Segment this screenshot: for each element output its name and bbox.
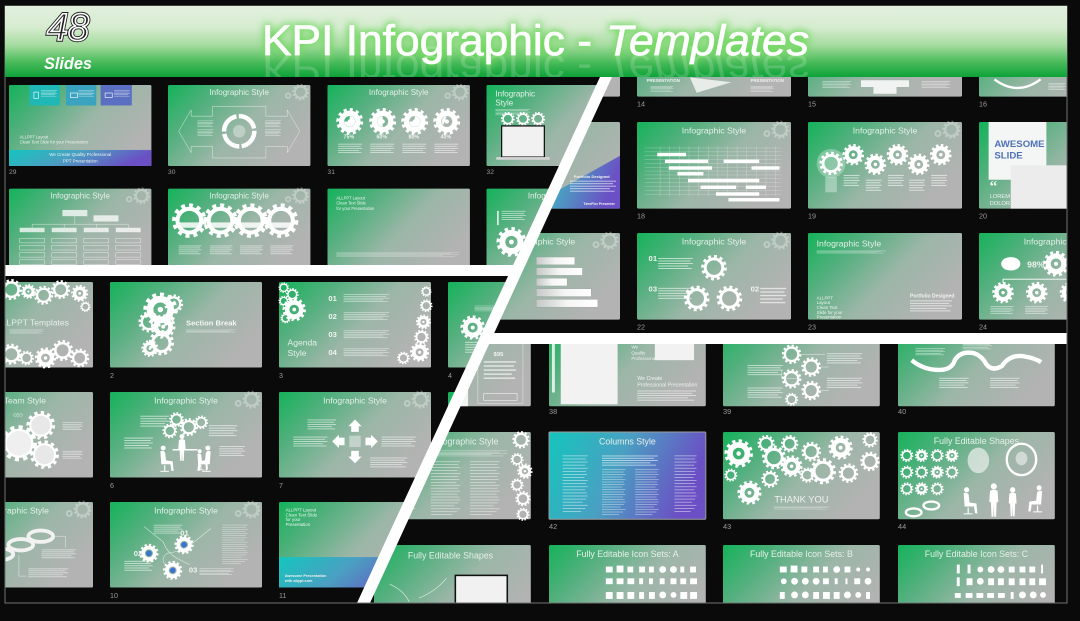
slide 38: Professional Presentation <box>637 383 697 389</box>
slide 2: Section Break <box>186 319 237 328</box>
slide 33 <box>9 188 151 270</box>
slide 48: Fully Editable Icon Sets: C <box>925 549 1029 559</box>
slide 31 <box>328 85 470 176</box>
slides label: Slides <box>44 54 92 73</box>
slide 38 <box>549 344 706 414</box>
title reflection: KPI Infographic - <box>262 45 592 93</box>
slide 7: Infographic Style <box>323 395 387 405</box>
slide 10: 01 <box>180 528 190 537</box>
slide 19: 19 <box>808 211 816 220</box>
slide 10: Infographic Style <box>154 505 218 515</box>
title text <box>262 17 809 65</box>
slide 16 <box>979 77 1066 106</box>
slide 47: Fully Editable Icon Sets: B <box>750 549 853 559</box>
slide 3 <box>279 282 432 380</box>
slide 9 <box>0 502 93 588</box>
slide 42: Columns Style <box>599 437 656 447</box>
slide 32 <box>486 85 596 174</box>
slide 37 pricing <box>460 344 531 406</box>
slide 35: ALLPPT Layout <box>336 195 366 200</box>
slide 22: Infographic Style <box>682 237 746 247</box>
slide 13 <box>603 77 620 97</box>
slide 5 <box>0 392 93 478</box>
slide 22: 22 <box>637 322 645 331</box>
panel: slides 13-24 (top right) <box>466 10 1080 331</box>
slide 31: 80% <box>408 134 419 140</box>
slide 37 pricing: $95 <box>494 352 504 358</box>
slide 38: Professional <box>631 356 656 361</box>
slide 33: Infographic Style <box>50 191 111 200</box>
slide 6 <box>110 392 262 490</box>
title text: Templates <box>606 17 809 65</box>
slide 23: 23 <box>808 322 816 331</box>
slide 16: 16 <box>979 99 987 108</box>
panel: slides 29-36 (top left) <box>9 85 629 270</box>
slide 3: 03 <box>328 330 337 339</box>
slide 23: ALLPPT <box>817 295 833 300</box>
slide 10: 03 <box>189 565 197 574</box>
title banner <box>5 6 1067 93</box>
slide count 48: 48 <box>47 7 89 49</box>
slide 36: Infographic Style <box>528 191 588 200</box>
slide 11: Clean Text Slide <box>286 512 318 517</box>
slide 32: 32 <box>486 169 494 176</box>
slide 18 gantt: 18 <box>637 211 645 220</box>
slide 35: Clean Text Slide <box>336 201 367 206</box>
slide 11: Awesome Presentation <box>285 574 327 578</box>
slide 22: 02 <box>751 285 759 294</box>
slide 14: PRESENTATION <box>751 78 784 83</box>
slide 31: 40% <box>441 134 451 140</box>
slide 12 <box>448 502 600 588</box>
slide 10: 10 <box>110 592 118 600</box>
slide 2 <box>110 282 262 380</box>
slide 31: Infographic Style <box>369 88 429 97</box>
slide 44: Fully Editable Shapes <box>934 436 1020 446</box>
slide 31: 75% <box>344 134 354 140</box>
slide 23: Slide for your <box>817 310 843 315</box>
slide 29: We Create Quality Professional <box>49 152 111 157</box>
slide 7: 7 <box>279 482 283 490</box>
slide 3: 02 <box>328 312 337 321</box>
slide 15: 15 <box>808 99 816 108</box>
slide 20: “ <box>990 178 998 195</box>
slide 22 <box>637 233 791 331</box>
slide 31: 60% <box>376 134 387 140</box>
slide 5: CEO <box>13 413 23 418</box>
slide 20 <box>979 122 1066 218</box>
slide 22: 03 <box>649 285 657 294</box>
slide 43: 43 <box>723 522 731 531</box>
slide 24: 24 <box>979 322 987 331</box>
slide 2: 2 <box>110 372 114 380</box>
slide 23: Presentation <box>817 315 842 320</box>
slide 23 <box>808 233 962 331</box>
slide 48 <box>898 545 1055 621</box>
slide 43 <box>723 432 880 531</box>
slide 30: 30 <box>168 169 176 176</box>
slide 46: Fully Editable Icon Sets: A <box>576 549 679 559</box>
slide 11: with allppt.com <box>284 579 313 583</box>
slide 19 <box>808 122 962 220</box>
slide 42: 42 <box>549 522 557 531</box>
slide 15 <box>808 77 962 106</box>
slide 46 <box>549 545 706 621</box>
slide 20: AWESOME <box>994 139 1045 150</box>
slide 18 gantt: Infographic Style <box>682 126 746 136</box>
slide 6: Infographic Style <box>154 395 218 405</box>
slide 44: 44 <box>898 522 906 531</box>
slide 20: LOREM <box>990 194 1010 200</box>
slide 32: Infographic <box>495 90 535 99</box>
slide 3: 01 <box>328 294 338 303</box>
title reflection: Templates <box>606 45 809 93</box>
slide 4: 4 <box>448 372 452 380</box>
slide 41: Infographic Style <box>433 437 499 447</box>
slide 23: Infographic Style <box>817 238 881 248</box>
slide 6: 6 <box>110 482 114 490</box>
panel: slides 1-12 (bottom left) <box>0 280 600 600</box>
slide 45 <box>374 545 531 621</box>
slide 5: Team Style <box>4 395 46 405</box>
slide 20: SLIDE <box>994 151 1023 162</box>
title glow: Templates <box>606 17 809 65</box>
title glow: KPI Infographic - <box>262 17 592 65</box>
slide 35 <box>328 189 470 270</box>
slide 38: 38 <box>549 407 557 416</box>
slide 30: Infographic Style <box>209 88 270 97</box>
slide 14: 14 <box>637 99 645 108</box>
slide 40: 40 <box>898 407 906 416</box>
slide 34: Infographic Style <box>209 191 270 200</box>
slide 32: Style <box>495 98 514 107</box>
slide 42 <box>549 432 706 531</box>
slide 30 <box>168 85 310 176</box>
slide 23: Portfolio Designed <box>910 293 954 299</box>
slide 39 <box>723 344 880 414</box>
slide 29: PPT Presentation <box>63 158 98 163</box>
slide 14 <box>637 77 791 106</box>
slide 21 <box>500 232 620 320</box>
title glow <box>262 17 809 65</box>
slide 40 <box>898 344 1055 414</box>
slide 17: Portfolio Designed <box>574 174 610 179</box>
slide 39: 39 <box>723 407 731 416</box>
slide 23: Clean Text <box>817 305 838 310</box>
slide 47 <box>723 545 880 621</box>
slide 1 <box>0 280 93 368</box>
slide 10 <box>110 502 262 600</box>
slide 11: for your <box>286 517 301 522</box>
slide 36 <box>486 188 548 265</box>
slide 11: 11 <box>279 592 286 600</box>
slide 29: ALLPPT Layout <box>20 134 49 139</box>
slide 7 <box>279 392 431 490</box>
slide 35: for your Presentation <box>336 206 374 211</box>
slide 11: ALLPPT Layout <box>286 507 317 512</box>
slide 31: 31 <box>328 169 335 176</box>
slide 14: PRESENTATION <box>647 78 680 83</box>
slide 45: Fully Editable Shapes <box>408 551 494 561</box>
slide 29 <box>9 85 151 176</box>
slide 18 gantt <box>637 122 791 220</box>
slide 38: We Create <box>637 376 662 382</box>
slide 41 <box>374 432 532 520</box>
title text: KPI Infographic - <box>262 17 592 65</box>
slide 19: Infographic Style <box>853 126 917 136</box>
slide 17 <box>551 122 620 209</box>
slide 11 <box>279 502 404 598</box>
slide 38: We <box>631 344 638 349</box>
slide 24: 98% <box>1027 260 1045 270</box>
slide 20: DOLOR <box>990 201 1010 207</box>
slide 34 <box>168 188 310 270</box>
slide 3: 04 <box>328 348 338 357</box>
slide count 48: 48 <box>47 7 89 49</box>
slide 11: Presentation <box>286 522 311 527</box>
slide 22: 01 <box>649 254 658 263</box>
slide 4 <box>448 282 506 378</box>
slide 17: TimeFlor Presenter <box>583 202 615 206</box>
slide 23: Layout <box>817 300 831 305</box>
slide 3: Style <box>288 348 307 358</box>
title reflection <box>262 45 809 93</box>
slide 3: 3 <box>279 372 283 380</box>
slide 10: 02 <box>134 549 142 558</box>
slide 38: Quality <box>631 350 646 355</box>
panel: slides 37-48 (bottom right) <box>374 319 1055 621</box>
slide 43: THANK YOU <box>774 495 828 505</box>
slide 8 <box>448 392 454 406</box>
slide 29: Clean Text Slide for your Presentation <box>20 140 88 145</box>
slide 21: Infographic Style <box>511 237 575 247</box>
slide 29: 29 <box>9 169 17 176</box>
slide 3: Agenda <box>288 338 317 348</box>
slide 24 <box>979 233 1066 330</box>
slide 44 <box>898 432 1055 531</box>
slide 20: 20 <box>979 211 987 220</box>
